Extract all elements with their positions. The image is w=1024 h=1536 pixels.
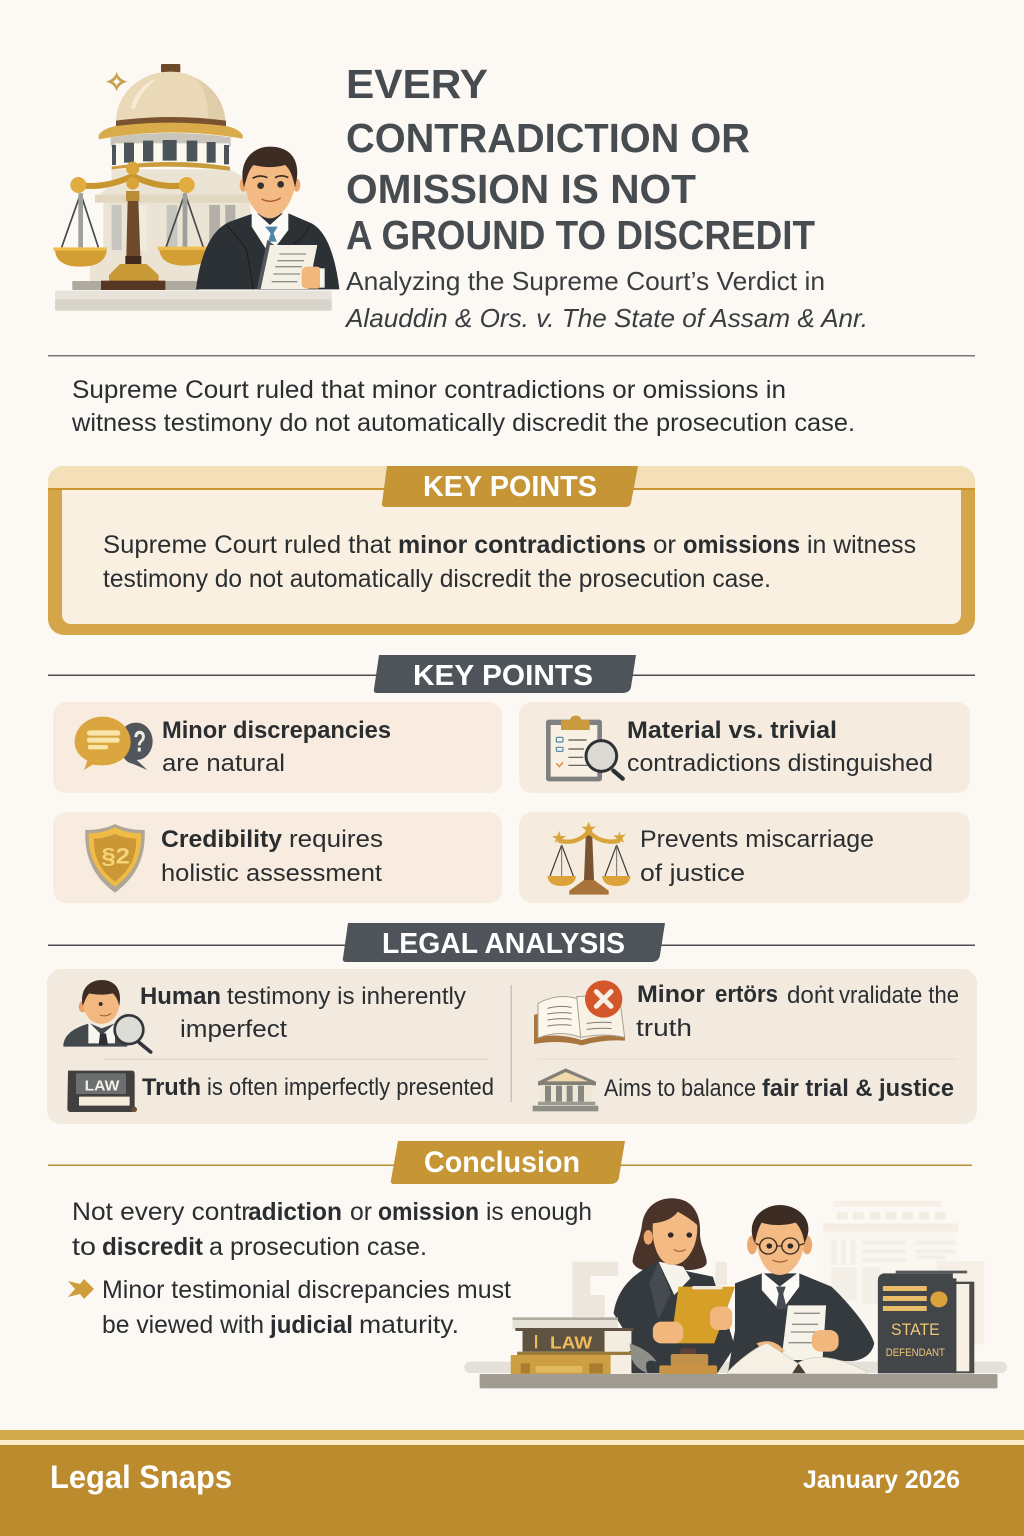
icon: small scales <box>547 822 631 895</box>
gavel block <box>659 1348 717 1374</box>
card text: requires <box>289 826 383 853</box>
conclusion text <box>72 1198 592 1261</box>
footer <box>0 1430 1024 1536</box>
section heading: legal analysis <box>48 923 975 962</box>
conclusion bullet text: be viewed with <box>102 1311 264 1339</box>
icon: speech bubbles <box>75 717 153 770</box>
text block: truth: is often imperfectly presented <box>207 1074 494 1101</box>
conclusion text: a prosecution case. <box>209 1233 427 1261</box>
subtitle: Analyzing the Supreme Court’s Verdict in <box>346 266 825 296</box>
illustration: supreme court, scales and judge <box>53 64 339 311</box>
balance scales <box>53 162 213 290</box>
conclusion text: to <box>72 1233 96 1261</box>
card text: Minor discrepancies <box>162 717 391 744</box>
conclusion text: Not every contr <box>72 1198 250 1226</box>
section heading: key points <box>48 655 975 693</box>
card: minor discrepancies <box>53 702 502 793</box>
plinth <box>55 291 332 311</box>
title: EVERY <box>346 61 488 107</box>
conclusion text: discredit <box>102 1233 204 1261</box>
icon: law book <box>67 1071 137 1112</box>
card text <box>161 826 383 887</box>
state defendant book: STATE <box>891 1320 940 1339</box>
card text <box>627 717 933 777</box>
text block: human testimony: testimony is inherently <box>227 983 467 1010</box>
brand: Legal Snaps <box>50 1459 232 1495</box>
text block: balance <box>604 1075 954 1102</box>
date: January 2026 <box>803 1466 960 1494</box>
card: prevents miscarriage <box>519 812 970 903</box>
icon: sparkle <box>106 72 128 91</box>
card text: Prevents miscarriage <box>640 826 874 853</box>
card text: Material vs. trivial <box>627 717 837 744</box>
subtitle <box>344 266 868 333</box>
text block: ruling: omissions <box>683 531 800 559</box>
text block: minor errors <box>636 981 959 1042</box>
man with glasses <box>728 1205 874 1373</box>
title <box>346 61 815 258</box>
card text <box>640 826 874 887</box>
conclusion bullet text: judicial <box>269 1311 353 1339</box>
conclusion bullet text: Minor testimonial discrepancies must <box>102 1276 511 1304</box>
icon: open book with error mark <box>534 980 625 1045</box>
icon: law book: LAW <box>85 1079 120 1095</box>
summary text: witness testimony do not automatically discredit the prosecution case. <box>71 409 855 437</box>
subtitle: Alauddin & Ors. v. The State of Assam & Anr. <box>344 303 868 333</box>
card: credibility <box>53 812 502 903</box>
text block: balance: fair trial & justice <box>762 1075 954 1102</box>
judge <box>196 147 339 289</box>
state defendant book: DEFENDANT <box>886 1347 945 1359</box>
icon: bullet arrow <box>68 1279 94 1299</box>
text block: ruling: testimony do not automatically discredit the prosecution case. <box>103 565 771 593</box>
conclusion text: adiction <box>248 1198 342 1226</box>
court building <box>72 64 252 290</box>
title: A GROUND TO DISCREDIT <box>346 212 815 258</box>
text block: truth: Truth <box>142 1074 201 1101</box>
icon: shield: §2 <box>101 843 130 868</box>
conclusion bullet text: maturity. <box>359 1311 459 1339</box>
law books: LAW <box>550 1332 593 1352</box>
conclusion bullet text <box>102 1276 511 1339</box>
illustration: lawyers at desk <box>464 1198 1007 1388</box>
text block: human testimony <box>140 983 467 1043</box>
text block: minor errors: ertörs <box>715 981 778 1008</box>
section heading: conclusion: Conclusion <box>424 1146 580 1179</box>
icon: person with magnifier <box>63 980 151 1052</box>
clipboard <box>653 1286 735 1343</box>
conclusion text: or <box>350 1198 372 1226</box>
conclusion text: omission <box>378 1198 479 1226</box>
card: material vs trivial <box>519 702 970 793</box>
text block: ruling: Supreme Court ruled that <box>103 531 391 559</box>
state defendant book <box>878 1271 974 1373</box>
text block: ruling <box>103 531 916 593</box>
title: OMISSION IS NOT <box>346 166 696 212</box>
panel: key points summary <box>48 466 975 635</box>
card text: are natural <box>162 750 285 777</box>
text block: minor errors: vralidate the <box>839 982 959 1009</box>
woman <box>614 1198 735 1373</box>
section heading: conclusion <box>48 1141 972 1184</box>
text block: minor errors: doṅt <box>787 982 834 1009</box>
heading badge: key points <box>382 466 638 507</box>
law books <box>511 1317 656 1374</box>
text block: minor errors: Minor <box>637 981 705 1008</box>
summary text <box>71 376 855 437</box>
icon: checklist and magnifier <box>546 716 623 781</box>
title: CONTRADICTION OR <box>346 115 750 161</box>
text block: minor errors: truth <box>636 1015 692 1042</box>
section heading: legal analysis: LEGAL ANALYSIS <box>382 928 625 960</box>
faded building background <box>572 1201 984 1345</box>
icon: speech bubbles: ? <box>133 726 146 759</box>
section heading: key points: KEY POINTS <box>413 660 593 692</box>
conclusion text: is enough <box>486 1198 592 1226</box>
text block: ruling: minor contradictions <box>398 531 646 559</box>
text block: human testimony: imperfect <box>180 1016 287 1043</box>
desk <box>480 1374 997 1388</box>
text block: human testimony: Human <box>140 983 221 1010</box>
icon: courthouse <box>533 1068 598 1111</box>
card text <box>162 717 391 777</box>
card text: of justice <box>640 860 745 887</box>
text block: ruling: in witness <box>807 531 916 559</box>
card text: contradictions distinguished <box>627 750 933 777</box>
desk shadow <box>464 1362 1007 1373</box>
summary text: Supreme Court ruled that minor contradictions or omissions in <box>72 376 786 404</box>
panel: legal analysis <box>47 969 977 1124</box>
card text: Credibility <box>161 826 282 853</box>
document and open book <box>727 1305 867 1373</box>
text block: ruling: or <box>653 531 676 559</box>
icon: shield <box>85 824 145 893</box>
heading badge: key points: KEY POINTS <box>423 471 597 503</box>
card text: holistic assessment <box>161 860 382 887</box>
text block: balance: Aims to balance <box>604 1075 756 1102</box>
